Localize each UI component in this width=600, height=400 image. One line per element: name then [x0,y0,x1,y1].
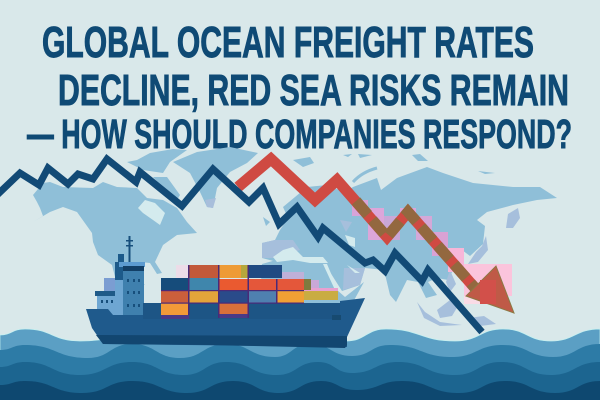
map: Southeast Asian islands [417,270,496,326]
hull window [332,315,341,320]
container ship [86,236,365,348]
map: Arctic islands [127,149,187,200]
lower deck containers [143,303,343,321]
map: North America [33,182,197,285]
waves [0,329,600,400]
red line olive tint [356,201,482,296]
container stack [161,265,338,319]
arrow head [466,266,514,313]
arrow head centre [480,280,496,304]
map: Novaya Zemlya and Arctic islands [353,168,377,182]
map: Africa [260,258,364,330]
map: Greenland [173,147,258,208]
map: shaded Europe and Arabia [262,220,365,290]
mast [126,236,133,264]
tinted halo behind containers [176,265,338,291]
red line [238,159,482,296]
keel band [96,335,347,348]
compression-like pink blocks along red line [352,200,512,304]
chart: dark blue falling line [0,159,482,332]
map: Mediterranean and inland seas [273,235,360,290]
wave layer 3 [0,362,600,400]
funnel [118,254,124,263]
title [27,18,572,157]
bridge tower [95,262,145,317]
map: Greenland tip shading [205,198,216,208]
chart: red declining line with arrow [238,159,514,313]
wave layer 2 [0,344,600,400]
world map [33,147,557,330]
wave layer 1 [0,329,600,400]
map: Eurasia [262,167,557,302]
map: Sakhalin and Japan [468,208,520,264]
wave layer 4 [0,381,600,400]
hull [86,298,365,347]
map: Hudson Bay [138,200,165,225]
map: Iceland and northern islands [263,154,495,226]
